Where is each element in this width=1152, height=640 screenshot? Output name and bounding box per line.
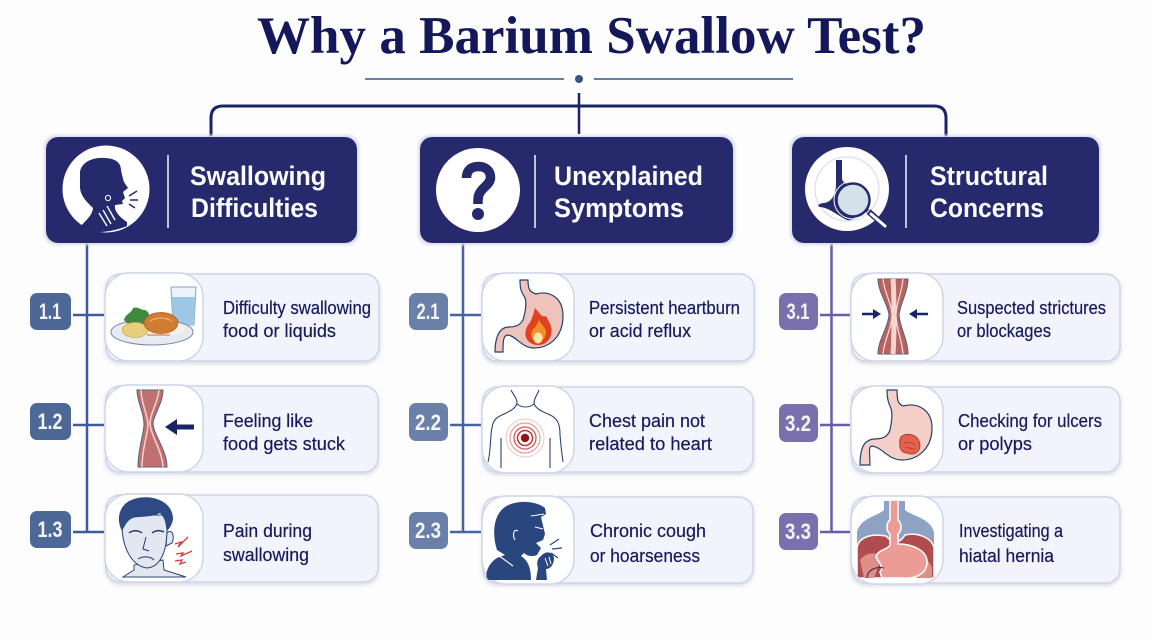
text: Feeling like — [223, 410, 313, 431]
badge 3.1 — [779, 293, 818, 330]
text: Suspected strictures — [957, 297, 1106, 318]
badge 1.3: 1.3 — [38, 517, 62, 542]
icon: hiatal hernia anatomy — [857, 500, 934, 578]
text — [958, 410, 1102, 454]
title: Why a Barium Swallow Test? — [257, 7, 926, 65]
text: Chronic cough — [590, 520, 706, 541]
card 1.1 — [105, 273, 379, 361]
badge 2.3 — [409, 512, 448, 549]
badge 2.3: 2.3 — [415, 518, 441, 543]
badge 2.2 — [409, 403, 448, 441]
badge 3.3: 3.3 — [785, 519, 811, 544]
icon: narrowed esophagus with arrow — [137, 390, 194, 467]
card 3.1 — [851, 273, 1120, 361]
text: or acid reflux — [589, 320, 692, 341]
text: or polyps — [958, 433, 1032, 454]
heading: Structural — [930, 161, 1048, 191]
icon: stomach under magnifier — [805, 147, 889, 231]
badge 1.1 — [30, 293, 71, 330]
heading: Unexplained — [554, 161, 703, 191]
panel: unexplained symptoms header — [420, 137, 733, 243]
panel: structural concerns header — [792, 137, 1099, 243]
badge 3.2 — [779, 404, 818, 442]
title divider — [365, 75, 793, 83]
card 1.3 — [105, 494, 378, 582]
heading: Swallowing — [190, 161, 326, 191]
text — [589, 410, 712, 454]
text: related to heart — [589, 433, 712, 454]
panel: swallowing difficulties header — [46, 137, 357, 243]
icon: question mark — [436, 148, 520, 232]
card 3.2 — [851, 386, 1120, 473]
text: Investigating a — [959, 520, 1064, 541]
text — [957, 297, 1106, 341]
heading line 2: Difficulties — [191, 193, 318, 223]
text: hiatal hernia — [959, 545, 1055, 566]
text — [223, 410, 346, 454]
text: food gets stuck — [223, 433, 346, 454]
badge 2.1 — [409, 293, 448, 330]
text: Persistent heartburn — [589, 297, 740, 318]
card 2.2 — [482, 386, 753, 473]
text: Pain during — [223, 520, 312, 541]
badge 3.1: 3.1 — [786, 299, 810, 324]
icon: man with neck pain — [119, 497, 192, 577]
card 1.2 — [105, 385, 378, 472]
badge 1.3 — [30, 511, 71, 548]
text: swallowing — [223, 544, 309, 565]
heading line 2: Symptoms — [554, 193, 684, 223]
text — [223, 520, 312, 565]
text: Chest pain not — [589, 410, 705, 431]
text: food or liquids — [223, 320, 336, 341]
icon: stomach with polyp — [860, 390, 932, 465]
card 3.3 — [851, 496, 1120, 584]
badge 2.1: 2.1 — [416, 299, 440, 324]
heading line 2: Concerns — [930, 193, 1044, 223]
connector: column 3 tree — [820, 243, 850, 532]
icon: person holding throat — [62, 146, 150, 232]
text: Checking for ulcers — [958, 410, 1102, 431]
text — [590, 520, 706, 566]
connector: top tree — [211, 93, 946, 137]
badge 2.2: 2.2 — [415, 410, 441, 435]
badge 1.2 — [30, 403, 71, 440]
badge 1.1: 1.1 — [39, 299, 61, 324]
text: or hoarseness — [590, 545, 700, 566]
icon: person coughing — [486, 502, 562, 580]
connector: column 2 tree — [450, 243, 481, 532]
text — [589, 297, 740, 341]
text — [959, 520, 1064, 566]
badge 3.3 — [779, 513, 818, 550]
card 2.3 — [482, 496, 753, 584]
card 2.1 — [482, 273, 754, 361]
badge 3.2: 3.2 — [785, 411, 811, 436]
badge 1.2: 1.2 — [38, 409, 62, 434]
text — [223, 297, 371, 341]
icon: plate of food and water glass — [111, 287, 196, 345]
icon: stricture with two arrows — [862, 279, 928, 354]
connector: column 1 tree — [73, 243, 104, 532]
text: Difficulty swallowing — [223, 297, 371, 318]
icon: chest with pain rings — [488, 390, 563, 468]
icon: stomach with flame — [495, 280, 563, 352]
text: or blockages — [957, 320, 1051, 341]
